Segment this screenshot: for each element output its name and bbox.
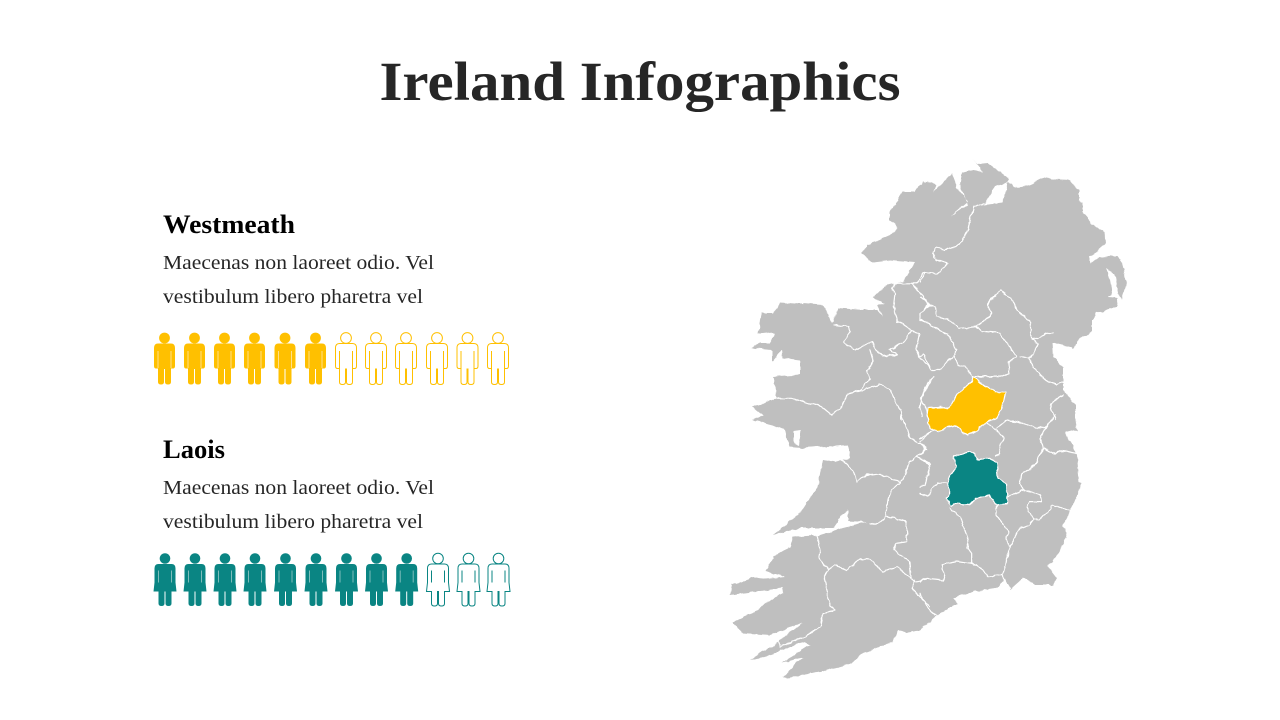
text block: Westmeath description: Maecenas non laoreet odio. Vel [163, 252, 434, 274]
county: Laois (teal) [947, 452, 1008, 506]
text block: Laois description: Maecenas non laoreet odio. Vel [163, 477, 434, 499]
map of Ireland [730, 159, 1127, 678]
title: Ireland Infographics [380, 51, 900, 112]
heading: Laois: Laois [163, 435, 225, 464]
text block: Westmeath description: vestibulum libero pharetra vel [163, 286, 423, 308]
text block: Laois description: vestibulum libero pharetra vel [163, 511, 423, 533]
heading: Westmeath: Westmeath [163, 210, 296, 239]
island silhouette [730, 159, 1127, 678]
pictogram: teal people, 9 of 12 filled [154, 553, 510, 606]
panel: Laois [154, 435, 510, 606]
panel: Westmeath [154, 210, 508, 384]
county borders [775, 203, 1077, 647]
text block: Westmeath description [163, 252, 434, 308]
text block: Laois description [163, 477, 434, 533]
pictogram: yellow people, 6 of 12 filled [154, 333, 508, 384]
county: Westmeath (yellow) [927, 376, 1006, 435]
